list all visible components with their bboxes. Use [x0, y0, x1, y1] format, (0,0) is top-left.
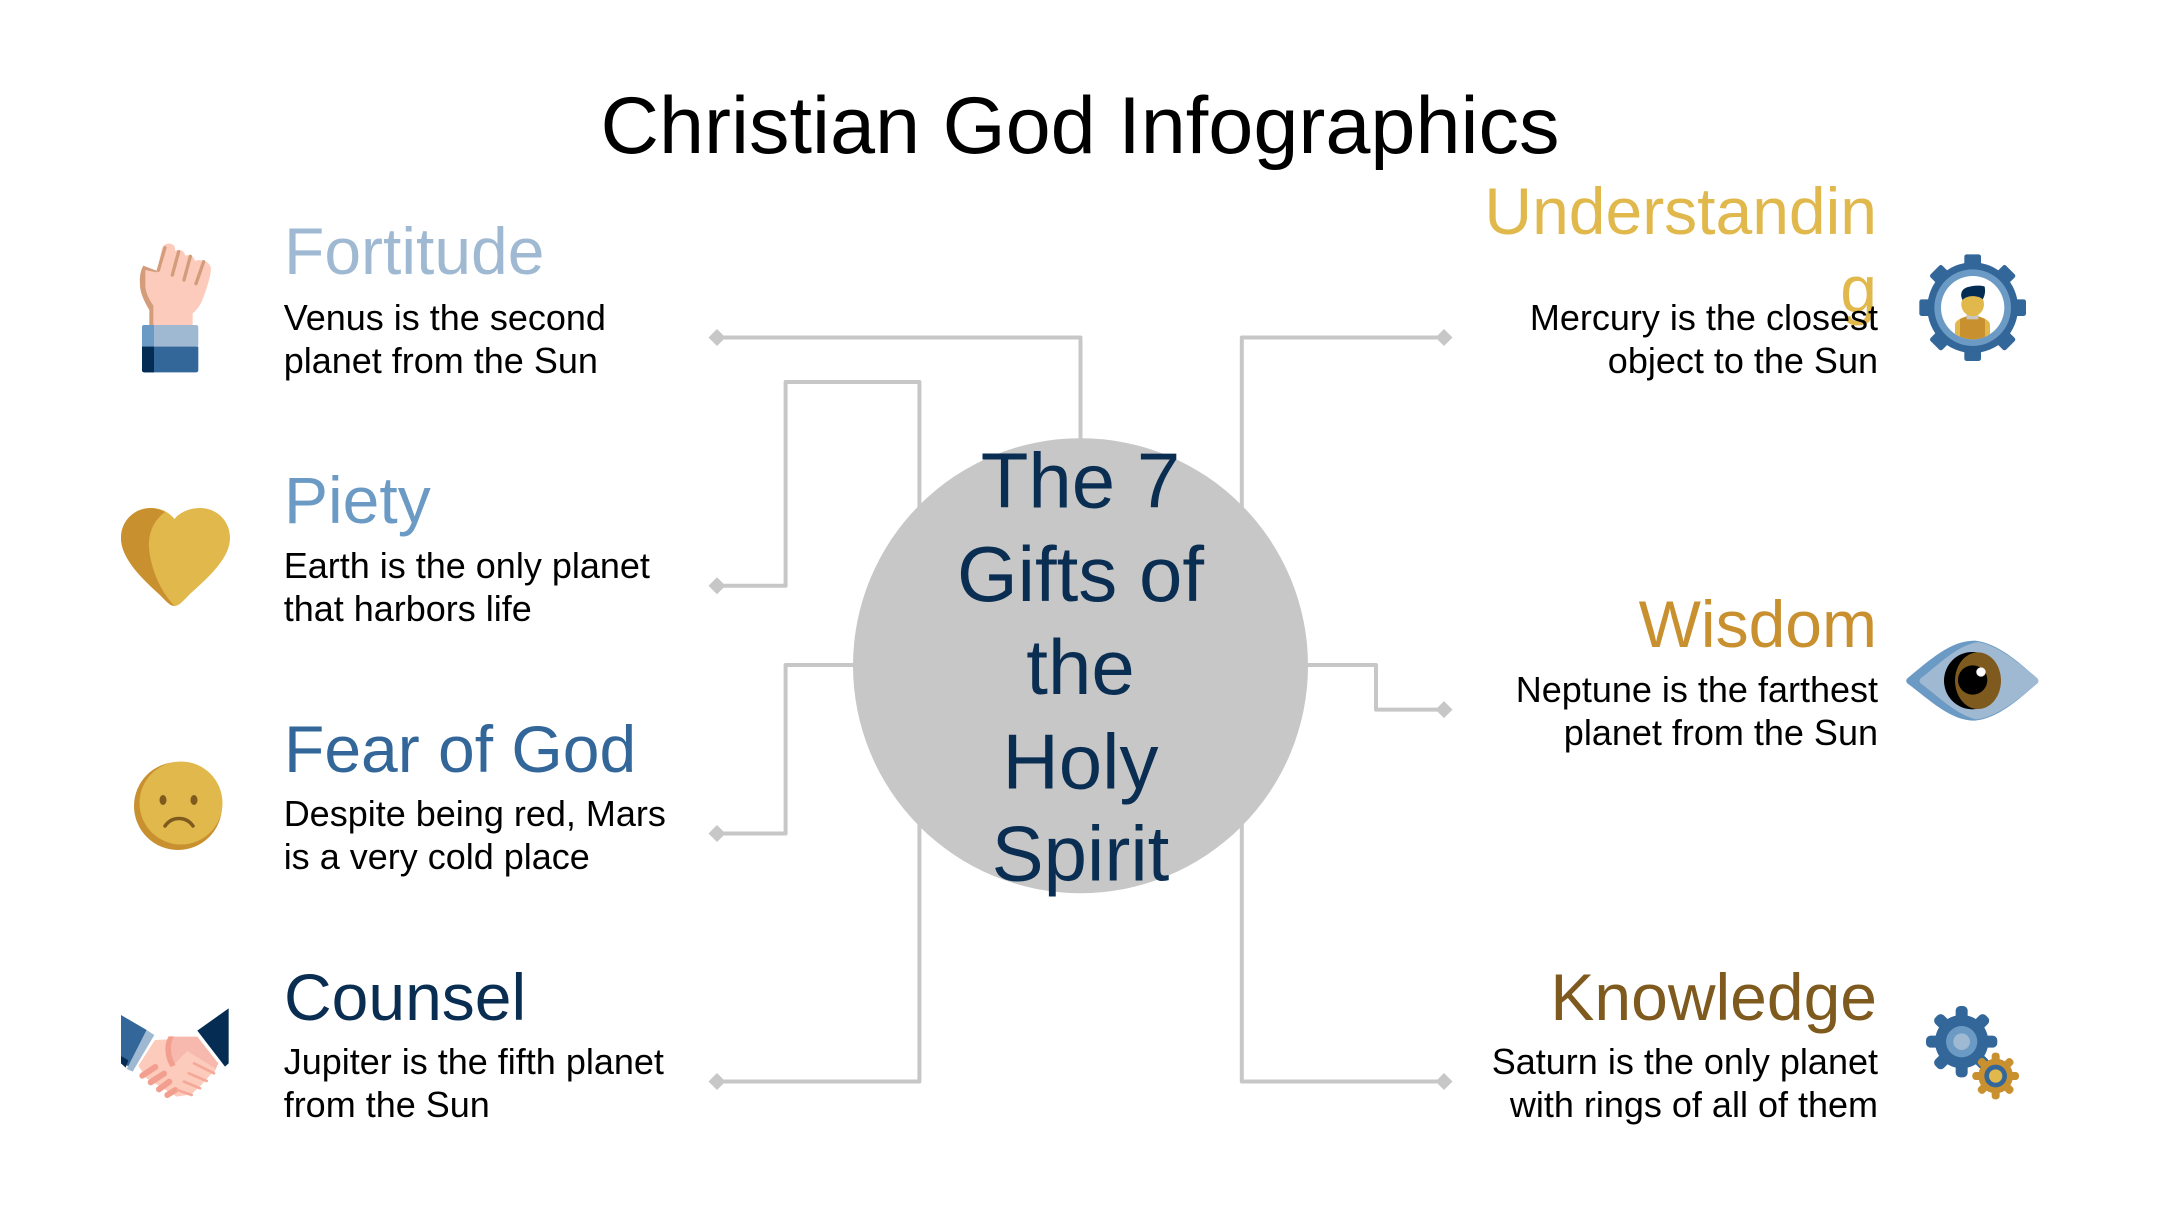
- description: planet from the Sun: [284, 340, 598, 381]
- description: Neptune is the farthest: [1516, 669, 1878, 710]
- description: planet from the Sun: [1564, 712, 1878, 753]
- connector: Fear of God: [708, 665, 870, 842]
- connector: Fortitude: [708, 329, 1080, 460]
- description: Saturn is the only planet: [1492, 1041, 1878, 1082]
- panel: Wisdom: [1516, 587, 2038, 753]
- panel: Knowledge: [1492, 960, 2019, 1125]
- panel: Understanding: [1484, 174, 2026, 381]
- title: Christian God Infographics: [600, 81, 1560, 171]
- center text: the: [1026, 623, 1135, 711]
- description: is a very cold place: [284, 836, 590, 877]
- icon: heart: [121, 508, 230, 606]
- panel: Piety: [121, 463, 650, 629]
- center text: Spirit: [992, 810, 1170, 898]
- description: with rings of all of them: [1509, 1084, 1878, 1125]
- description: Mercury is the closest: [1530, 297, 1878, 338]
- heading: Counsel: [284, 960, 526, 1034]
- heading: Fear of God: [284, 712, 636, 786]
- description: that harbors life: [284, 588, 532, 629]
- connector: Wisdom: [1290, 665, 1452, 718]
- heading: Piety: [284, 463, 431, 537]
- heading wrap: g: [1840, 252, 1877, 326]
- description: from the Sun: [284, 1084, 490, 1125]
- connector lines: [708, 329, 1452, 1090]
- panel: Counsel: [121, 960, 664, 1125]
- center text: Holy: [1002, 718, 1159, 806]
- connector: Knowledge: [1242, 810, 1452, 1090]
- icon: handshake: [121, 1008, 229, 1097]
- center text: The 7: [981, 437, 1180, 525]
- icon: eye: [1906, 641, 2038, 721]
- connector: Piety: [708, 382, 919, 594]
- description: Venus is the second: [284, 297, 606, 338]
- description: Earth is the only planet: [284, 545, 650, 586]
- icon: raised fist: [140, 244, 211, 372]
- panel: Fortitude: [140, 214, 606, 381]
- heading: Knowledge: [1550, 960, 1877, 1034]
- heading: Understandin: [1484, 174, 1877, 248]
- center text: Gifts of: [957, 530, 1204, 618]
- description: object to the Sun: [1608, 340, 1878, 381]
- description: Despite being red, Mars: [284, 793, 666, 834]
- icon: gear with person: [1919, 254, 2026, 361]
- heading: Wisdom: [1639, 587, 1877, 661]
- panel: Fear of God: [134, 712, 666, 877]
- center circle: [853, 438, 1308, 893]
- icon: sad face: [134, 762, 222, 850]
- connector: Understanding: [1242, 329, 1452, 530]
- connector: Counsel: [708, 810, 919, 1090]
- description: Jupiter is the fifth planet: [284, 1041, 664, 1082]
- icon: gears: [1926, 1006, 2019, 1099]
- heading: Fortitude: [284, 214, 544, 288]
